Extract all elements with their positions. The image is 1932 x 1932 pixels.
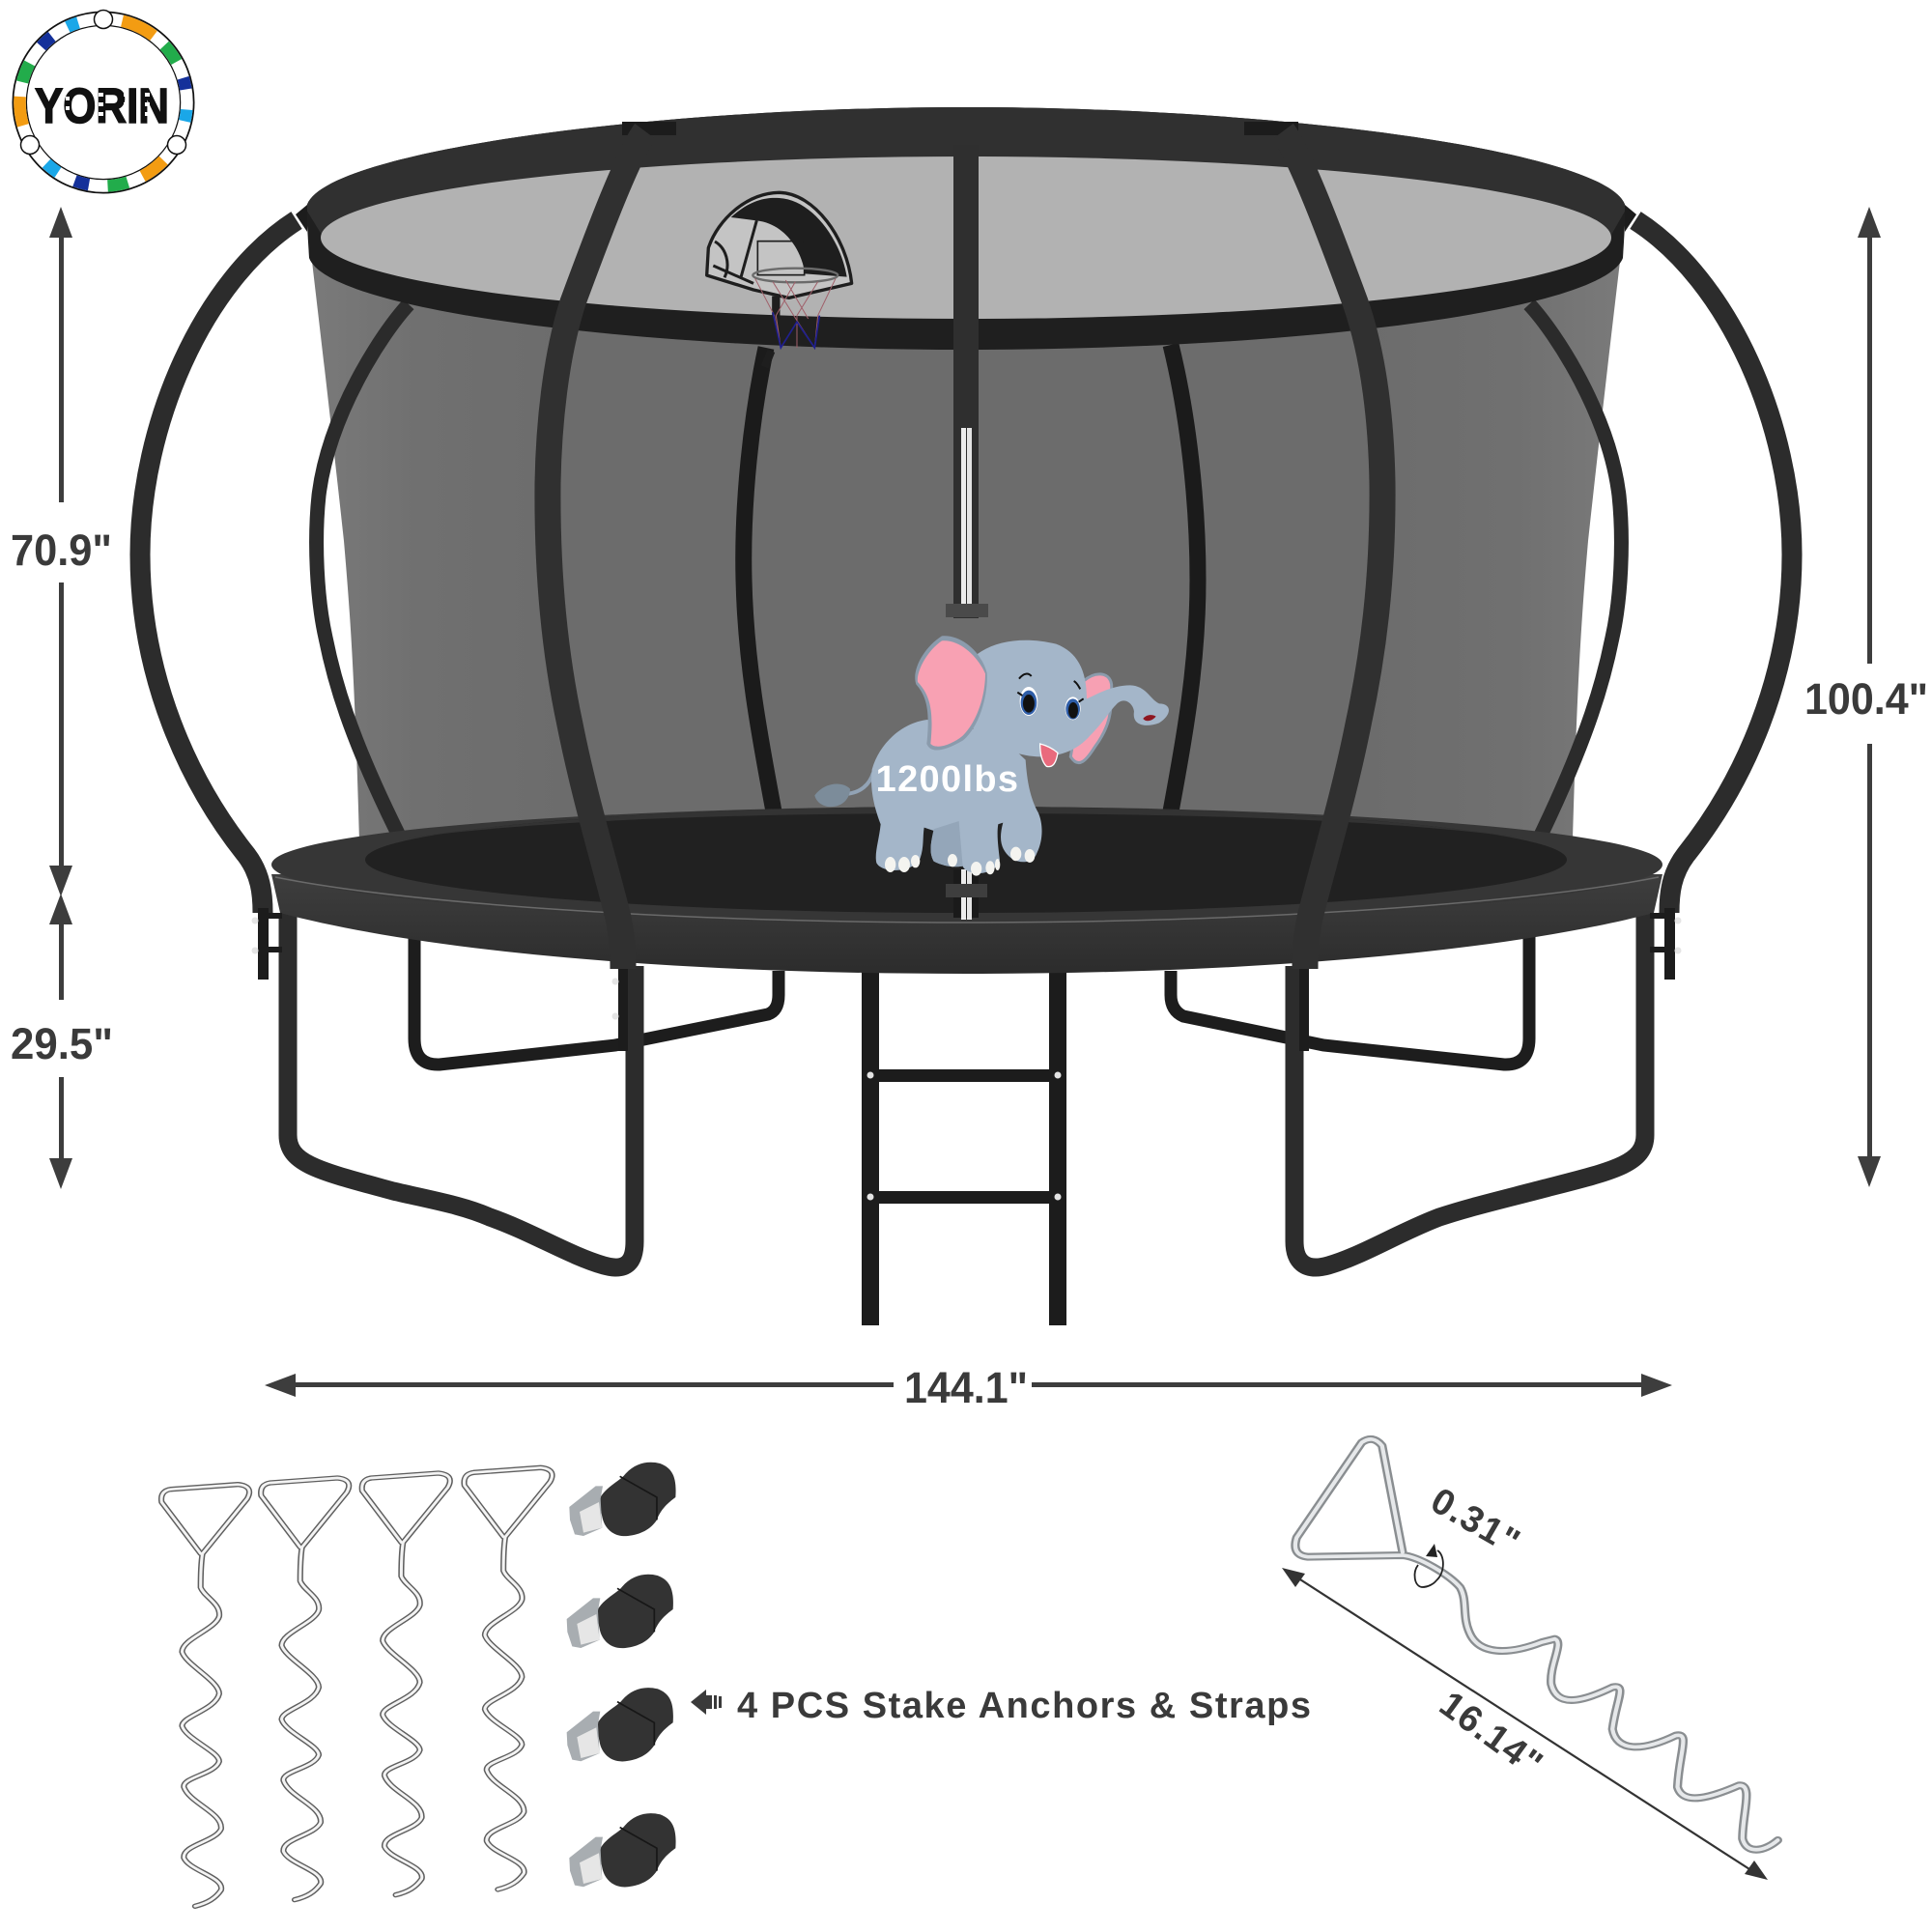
logo: YORIN badge: YORIN (35, 78, 169, 133)
body and legs (871, 720, 1042, 873)
tail (814, 773, 873, 807)
logo: YORIN badge (19, 10, 186, 185)
center pole (953, 145, 979, 618)
capacity label: 1200lbs (876, 759, 1018, 800)
enclosure net (311, 253, 1621, 840)
dimension: stake length 16.14 inches: 16.14" (1432, 1684, 1549, 1785)
nails (885, 847, 1035, 876)
elephant mascot with load capacity (814, 636, 1169, 876)
stake anchors set (161, 1467, 553, 1906)
face (1017, 674, 1156, 767)
frame pad and jumping mat (271, 807, 1662, 974)
front legs (288, 913, 1645, 1267)
icon: pointer arrow to straps (691, 1690, 722, 1715)
belly shading (930, 821, 963, 867)
head and trunk (973, 640, 1169, 756)
ratchet straps set (567, 1463, 676, 1887)
pole brackets (258, 122, 1675, 1051)
dimension: leg height 29.5 inches: 29.5" (11, 1019, 113, 1068)
outer enclosure poles (140, 220, 1792, 913)
dimension: enclosure height 70.9 inches (11, 207, 112, 896)
caption: stake anchors and straps: 4 PCS Stake Anchors & Straps (737, 1686, 1311, 1726)
dimension: width 144.1 inches: 144.1" (904, 1363, 1028, 1412)
dimension: total height 100.4 inches (1804, 207, 1928, 1187)
dimension: stake length 16.14 inches (1282, 1568, 1768, 1880)
trampoline (140, 107, 1792, 1325)
center pole lower section (946, 604, 988, 920)
dimension: rod diameter 0.31 inches: 0.31" (1424, 1481, 1526, 1563)
top ring and opening (306, 107, 1626, 350)
near ear (915, 636, 987, 751)
front enclosure poles (548, 131, 1382, 969)
dimension: total height 100.4 inches: 100.4" (1804, 674, 1928, 724)
dimension: enclosure height 70.9 inches: 70.9" (11, 526, 112, 575)
rear net poles (317, 304, 1621, 845)
single stake detail (1295, 1439, 1777, 1850)
dimension: leg height 29.5 inches (11, 894, 113, 1189)
basketball hoop (707, 192, 852, 367)
far ear (1070, 674, 1112, 763)
rear legs (414, 937, 1529, 1065)
ladder (862, 971, 1066, 1325)
dimension: width 144.1 inches (265, 1363, 1672, 1412)
